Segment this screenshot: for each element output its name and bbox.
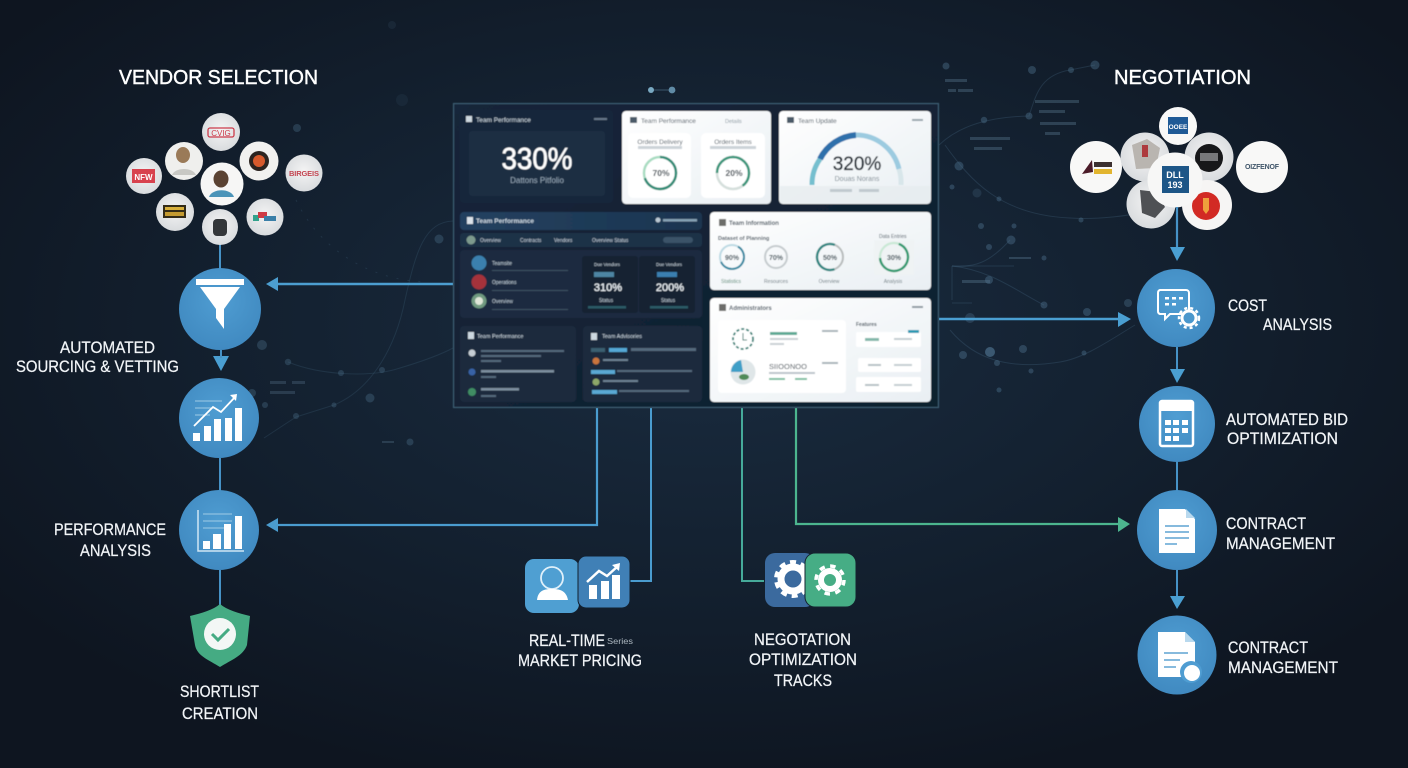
logo: red emblem [240,142,278,180]
logo: dark mask [202,209,238,245]
arrow: dashboard to performance analysis [266,408,597,532]
label: negotiation tracks: OPTIMIZATION [749,650,857,669]
panel: four rings: Team Information [729,221,779,227]
logo: red badge [1182,180,1232,230]
panel: gauge: 320% [833,154,881,175]
label: automated bid optimization [1226,410,1348,448]
panel: four rings: Statistics [721,279,741,285]
panel: vendor list and metrics: 310% [594,282,622,294]
icon: market pricing tiles [525,556,630,613]
panel: vendor list and metrics: Due Vendors [594,262,621,267]
icon: funnel [179,268,261,350]
label: contract management [1226,514,1335,553]
panel: four rings: Analysis [884,279,903,285]
panel: schedule summary [710,298,931,402]
dashboard [454,104,938,408]
decorative top dots [648,87,675,93]
label: contract management: MANAGEMENT [1226,534,1335,553]
logo: right wordmark: OIZFENOF [1245,164,1280,171]
logo: right wordmark [1236,141,1288,193]
panel: headline metric: Dattons Pitfolio [510,176,564,185]
panel: schedule summary: SIIOONOO [769,362,807,371]
arrow: dashboard to automated sourcing [266,277,453,291]
label: negotiation tracks [749,630,857,690]
connector: dashboard to market pricing [629,408,651,581]
panel: two rings: 20% [725,168,743,178]
label: shortlist creation: CREATION [182,704,258,723]
arrow: dashboard to cost analysis [939,312,1131,327]
label: automated sourcing: AUTOMATED [60,338,155,357]
label: cost analysis: ANALYSIS [1263,315,1332,334]
panel: four rings: 30% [887,255,902,262]
panel: two rings: Details [725,119,742,125]
label: automated sourcing: SOURCING & VETTING [16,357,179,376]
logo: brand mark top [202,113,240,151]
label: market pricing: Series [607,637,633,646]
logo: wordmark right [286,154,322,192]
step: automated sourcing [179,268,261,371]
icon: performance bars [179,490,259,570]
label: contract management repeat: MANAGEMENT [1228,658,1338,677]
connectors from dashboard [266,277,1131,581]
logo: grey emblem [1120,132,1170,182]
logo: center blue tile: 193 [1167,180,1183,190]
label: performance analysis [54,520,166,560]
label: contract management repeat [1228,638,1338,677]
logo: portrait center [200,162,244,206]
panel: two rings: Orders Delivery [637,139,683,146]
logo: top blue tile [1159,107,1197,145]
logo: portrait woman [165,142,203,180]
panel: two rings: 70% [652,168,670,178]
icon: shield check [190,570,250,667]
panel: schedule summary: Administrators [729,306,772,312]
network decoration: left [248,21,453,446]
label: negotiation tracks: NEGOTATION [754,630,851,649]
label: contract management: CONTRACT [1226,514,1306,533]
label: cost analysis: COST [1228,296,1267,315]
panel: dark header bar [460,212,702,230]
panel: four rings: 90% [725,255,740,262]
label: contract management repeat: CONTRACT [1228,638,1308,657]
panel: dark header bar: Team Performance [476,218,534,225]
icon: contract with seal [1138,616,1216,694]
vendor logo cluster [126,113,322,272]
panel: four rings: Dataset of Planning [718,236,769,242]
label: market pricing: REAL-TIME [529,631,605,650]
label: cost analysis [1228,296,1332,334]
panel: gauge: Douas Norans [835,176,880,183]
logo: brand mark top: CVIG [211,129,231,138]
panel: vendor list and metrics: 200% [656,282,684,294]
logo: colored wordmark [246,198,284,236]
panel: tab row [460,233,702,247]
panel: headline metric: Team Performance [476,117,531,124]
label: performance analysis: PERFORMANCE [54,520,166,539]
label: market pricing: MARKET PRICING [518,651,642,670]
icon: cost analysis [1137,269,1215,347]
panel: four rings [710,212,931,290]
panel: vendor list and metrics: Status [661,298,676,304]
label: automated bid optimization: OPTIMIZATION [1227,429,1338,448]
panel: two rings [622,111,771,204]
panel: progress list [583,326,702,402]
logo: left wordmark [1070,141,1122,193]
arrow: contract to contract renewal [1170,570,1185,609]
icon: optimization gears [765,553,856,607]
panel: vendor list and metrics: Overview [492,299,513,305]
label: shortlist creation: SHORTLIST [180,682,259,701]
network decoration: right [939,60,1140,392]
arrow: logos to cost analysis [1170,207,1185,261]
logo: red tile [126,158,162,194]
panel: four rings: 50% [823,255,838,262]
panel: tab row: Vendors [554,238,573,244]
heading: vendor selection: VENDOR SELECTION [119,67,318,89]
logo: red tile: NFW [134,173,153,182]
panel: activity list: Team Performance [477,334,523,340]
panel: two rings: Team Performance [641,118,696,125]
panel: headline metric: 330% [502,141,572,176]
panel: vendor list and metrics [460,250,702,318]
logo: wordmark right: BIRGEIS [289,169,319,178]
panel: four rings: Overview [819,279,840,285]
panel: gauge: Team Update [798,118,837,125]
negotiation logo cluster [1070,107,1288,230]
panel: vendor list and metrics: Operations [492,280,517,286]
arrow: dashboard to contract management [796,408,1130,532]
logo: dark badge [1184,132,1234,182]
label: market pricing [518,631,642,670]
panel: four rings: Data Entries [879,234,907,240]
connector: dashboard to negotiation tracks [742,408,764,581]
logo: center blue tile: DLL [1166,170,1184,180]
icon: contract document [1137,490,1217,570]
label: automated sourcing [16,338,179,376]
logo: yellow badge [156,193,194,231]
label: automated bid optimization: AUTOMATED BID [1226,410,1348,429]
label: performance analysis: ANALYSIS [80,541,151,560]
panel: gauge [779,111,931,204]
panel: four rings: Resources [764,279,788,285]
panel: headline metric [460,110,613,203]
label: negotiation tracks: TRACKS [774,671,832,690]
logo: grey figure [1126,180,1176,228]
panel: four rings: 70% [769,255,784,262]
panel: tab row: Overview Status [592,238,629,244]
panel: vendor list and metrics: Teamsite [492,261,512,267]
icon: calculator [1139,386,1215,492]
panel: schedule summary: Features [856,322,877,328]
icon: rising chart [179,378,259,491]
panel: tab row: Overview [480,238,501,244]
panel: two rings: Orders Items [714,139,753,146]
panel: activity list [460,326,576,402]
panel: vendor list and metrics: Due Vendors [656,262,683,267]
logo: center blue tile [1148,152,1202,208]
panel: tab row: Contracts [520,238,542,244]
arrow: cost to bid optimization [1170,347,1185,383]
logo: top blue tile: OOEE [1169,124,1188,131]
label: shortlist creation [180,682,259,723]
panel: progress list: Team Advisories [602,334,642,340]
heading: negotiation: NEGOTIATION [1114,67,1251,89]
panel: vendor list and metrics: Status [599,298,614,304]
